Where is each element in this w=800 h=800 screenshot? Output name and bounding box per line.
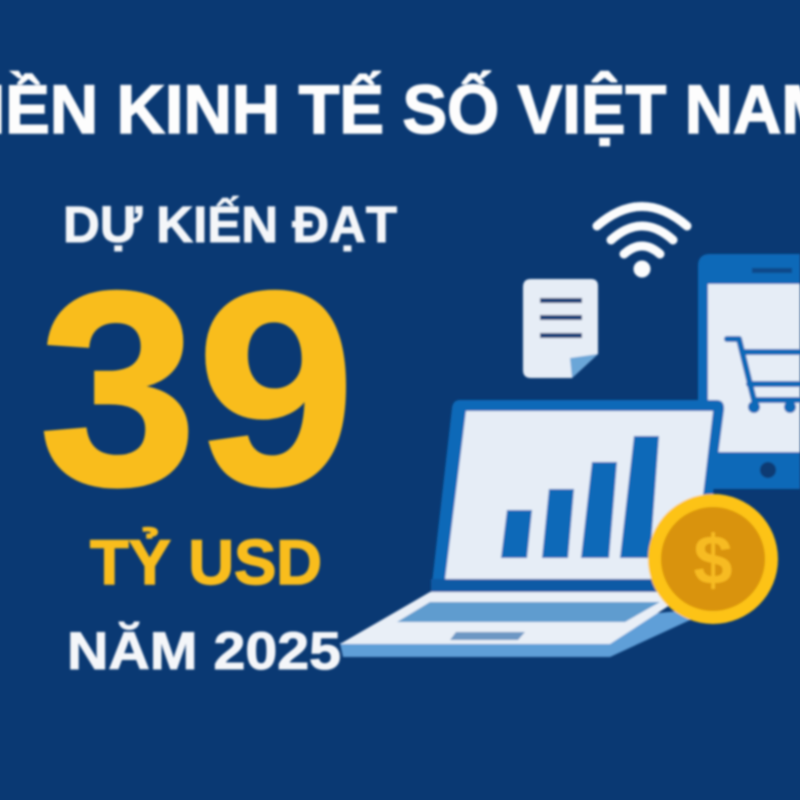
icon: shopping cart (727, 339, 800, 410)
unit: billion USD: TỶ USD (90, 527, 322, 598)
big number 39: 39 (39, 235, 355, 543)
subheading: expected to reach: DỰ KIẾN ĐẠT (63, 195, 397, 253)
icon: gold dollar coin: $ (694, 521, 732, 599)
icon: laptop with bar chart (340, 400, 724, 657)
year label: NĂM 2025 (67, 621, 341, 681)
icon: tablet with shopping cart (698, 254, 800, 489)
icon: wifi (597, 206, 687, 275)
icon: document (523, 279, 598, 378)
bar chart (501, 436, 659, 558)
icon: gold dollar coin (648, 494, 778, 624)
laptop base (340, 610, 690, 657)
